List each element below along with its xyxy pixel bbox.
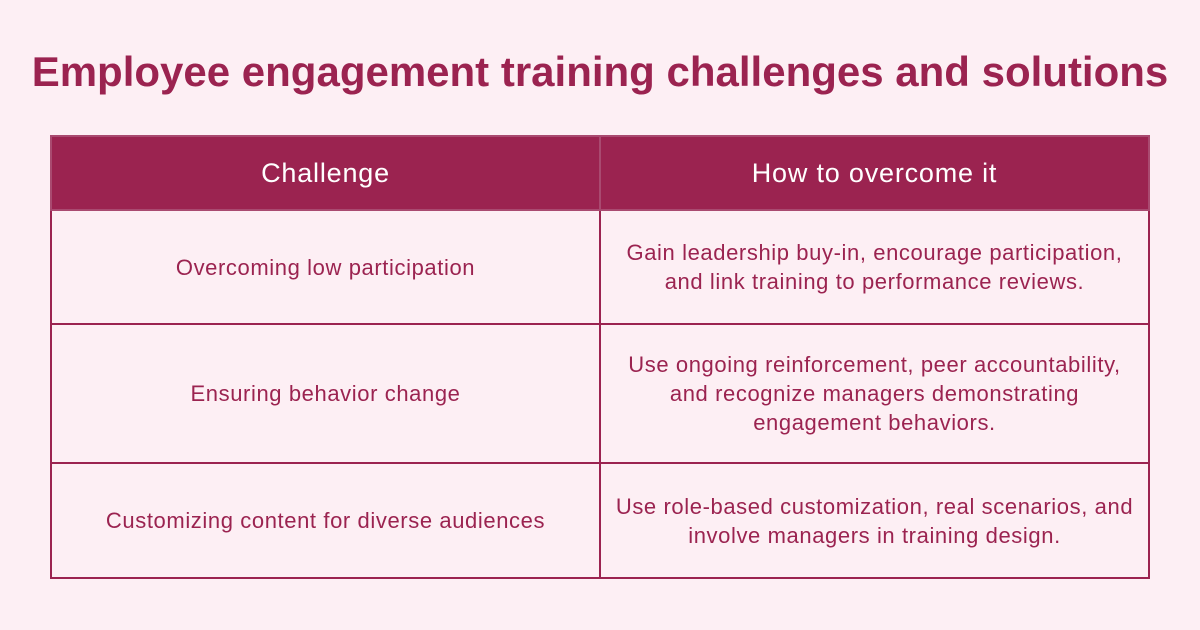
table: challenges and solutions: Use role-based customization, real scenarios, and <box>616 494 1133 518</box>
table: challenges and solutions: Ensuring behavior change <box>190 381 461 406</box>
table: challenges and solutions: Gain leadership buy-in, encourage participation, <box>626 240 1122 265</box>
title: Employee engagement training challenges and solutions <box>32 48 1168 95</box>
table: challenges and solutions: and recognize managers demonstrating <box>670 381 1079 406</box>
table: challenges and solutions: Customizing content for diverse audiences <box>106 508 545 533</box>
table: challenges and solutions: and link training to performance reviews. <box>665 269 1084 294</box>
table: challenges and solutions: Challenge <box>261 158 390 188</box>
table: challenges and solutions: engagement behaviors. <box>753 410 996 435</box>
table: challenges and solutions: Use ongoing reinforcement, peer accountability, <box>628 352 1121 377</box>
table: challenges and solutions: involve managers in training design. <box>688 522 1061 548</box>
table: challenges and solutions: Overcoming low participation <box>176 254 475 280</box>
table: challenges and solutions: How to overcome it <box>752 158 997 188</box>
table: challenges and solutions <box>50 135 1150 579</box>
